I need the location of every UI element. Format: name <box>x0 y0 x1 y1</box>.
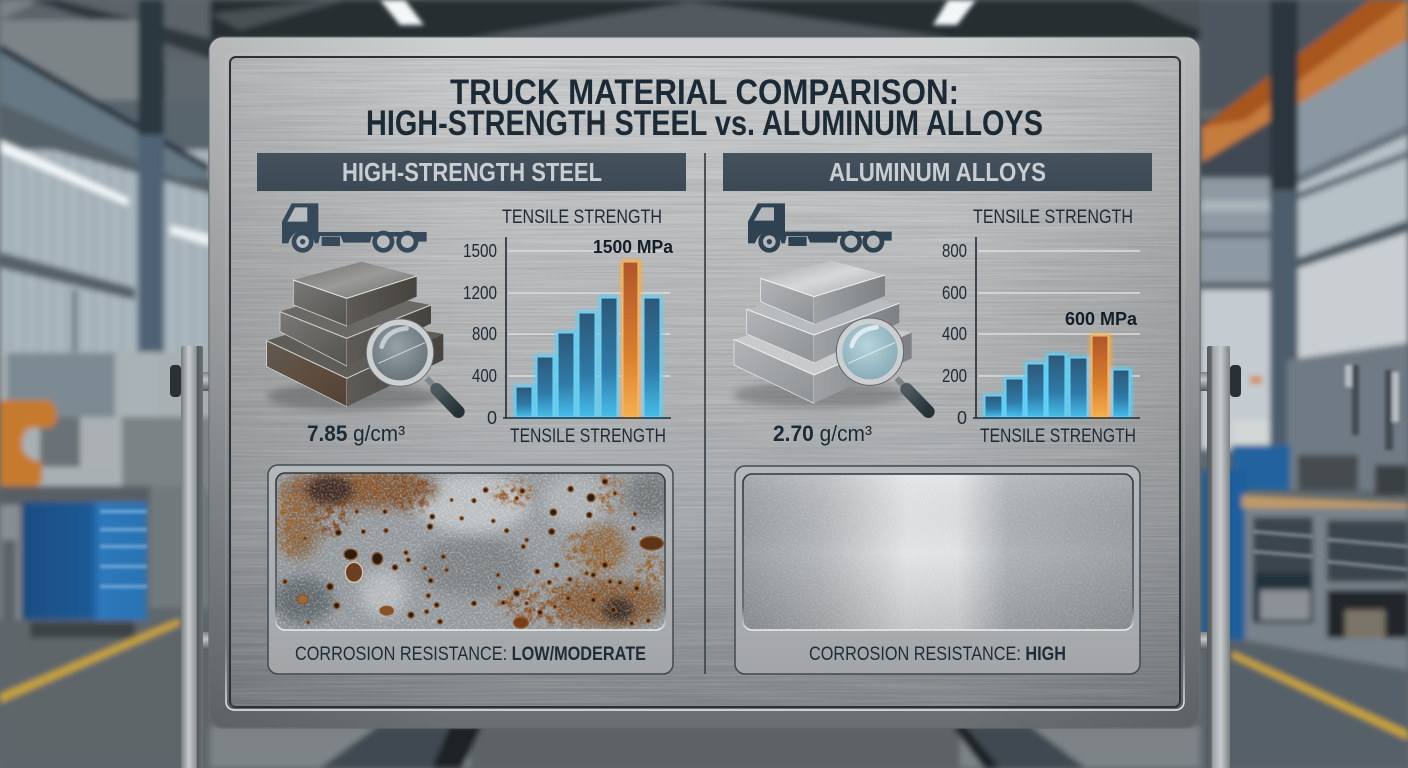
bar chart: aluminum tensile strength: 200 <box>942 366 967 386</box>
bar chart: steel tensile strength: 1200 <box>463 283 497 303</box>
icon: magnifying glass <box>836 318 928 412</box>
top band <box>210 0 1200 40</box>
bar chart: aluminum tensile strength: 600 MPa <box>1065 309 1138 329</box>
icon: flatbed truck <box>748 203 892 253</box>
bar chart: aluminum tensile strength: 800 <box>942 241 967 261</box>
bar chart: aluminum tensile strength: 600 <box>942 283 967 303</box>
heading: aluminum alloys <box>723 153 1152 191</box>
left hall <box>0 0 215 60</box>
panel: aluminum alloys <box>723 153 1152 674</box>
title: HIGH-STRENGTH STEEL vs. ALUMINUM ALLOYS <box>366 104 1043 143</box>
heading: high-strength steel: HIGH-STRENGTH STEEL <box>342 157 602 187</box>
icon: magnifying glass <box>366 319 458 412</box>
density value: aluminum: 2.70 g/cm³ <box>773 421 872 446</box>
heading: high-strength steel <box>257 153 686 191</box>
bar chart: steel tensile strength: TENSILE STRENGTH <box>502 207 662 228</box>
density value: steel: 7.85 g/cm³ <box>307 421 405 446</box>
corrosion panel: steel: CORROSION RESISTANCE: LOW/MODERATE <box>295 644 646 665</box>
metal board <box>209 37 1200 728</box>
corrosion panel: aluminum <box>735 466 1140 674</box>
bar chart: steel tensile strength <box>463 207 674 447</box>
right support post <box>1200 346 1241 768</box>
bar chart: aluminum tensile strength: 400 <box>942 324 967 344</box>
bar chart: steel tensile strength: TENSILE STRENGTH <box>510 426 666 447</box>
icon: flatbed truck <box>282 203 427 253</box>
icon: aluminum slabs with magnifier <box>733 261 928 412</box>
bar chart: aluminum tensile strength: TENSILE STRENGTH <box>973 207 1133 228</box>
left support post <box>170 346 210 768</box>
bar chart: steel tensile strength: 1500 MPa <box>593 237 674 257</box>
panel: high-strength steel <box>257 153 686 674</box>
rusted metal surface <box>273 472 673 630</box>
bar chart: aluminum tensile strength <box>942 207 1140 447</box>
ceiling lights <box>380 0 976 25</box>
right hall <box>1200 0 1408 110</box>
bar chart: steel tensile strength: 400 <box>472 366 497 386</box>
icon: steel slabs with magnifier <box>267 262 458 412</box>
center divider <box>704 153 706 674</box>
corrosion panel: steel <box>268 465 673 674</box>
bar chart: aluminum tensile strength: TENSILE STRENGTH <box>980 426 1136 447</box>
title: TRUCK MATERIAL COMPARISON: <box>450 73 959 112</box>
polished aluminum surface <box>743 474 1133 630</box>
bar chart: steel tensile strength: 0 <box>487 408 497 428</box>
bar chart: aluminum tensile strength: 0 <box>957 408 967 428</box>
bottom floor <box>210 726 1200 768</box>
corrosion panel: aluminum: CORROSION RESISTANCE: HIGH <box>809 644 1066 665</box>
bar chart: steel tensile strength: 800 <box>472 324 497 344</box>
title <box>366 73 1043 143</box>
bar chart: steel tensile strength: 1500 <box>463 241 497 261</box>
heading: aluminum alloys: ALUMINUM ALLOYS <box>829 157 1046 187</box>
